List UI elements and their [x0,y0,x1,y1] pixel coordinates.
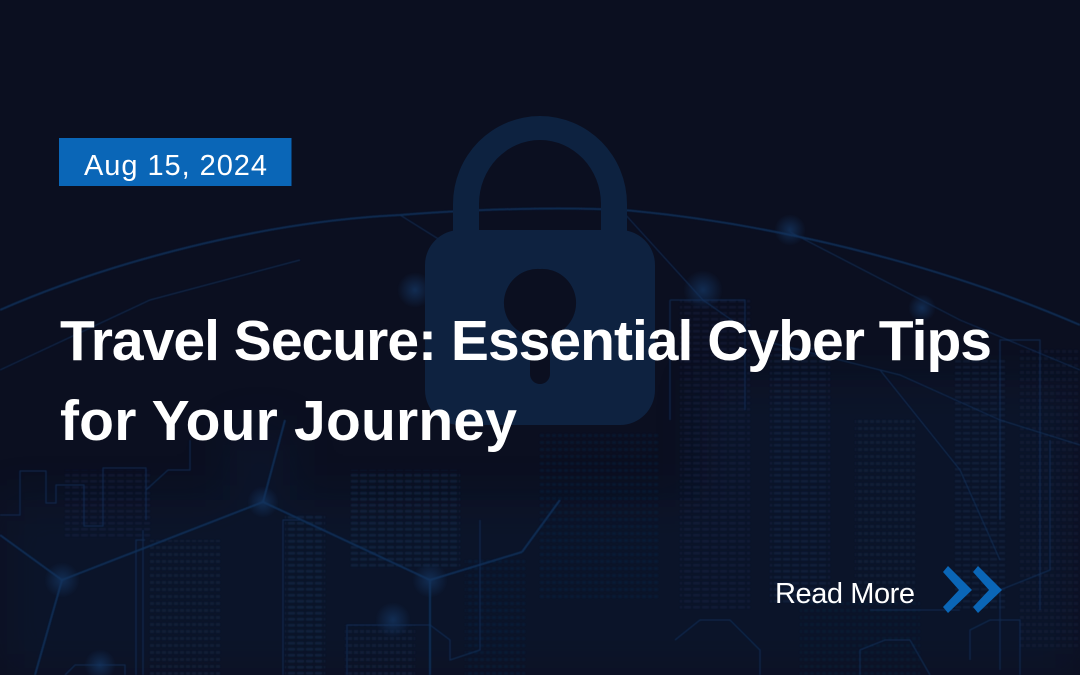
title line 1: Travel Secure: Essential Cyber Tips [60,309,992,373]
lock shackle [453,116,627,232]
background: network lines [0,209,1080,675]
lock body with keyhole [425,230,655,425]
title line 2: for Your Journey [60,389,517,453]
background: city skyline [0,300,1080,675]
date text: Aug 15, 2024 [84,150,267,182]
background: network glow points [44,214,936,675]
title [60,309,992,453]
icon: double chevron arrow [943,566,1002,613]
date badge [59,138,292,186]
icon: padlock [425,116,655,425]
read more text: Read More [775,578,915,610]
read more link [775,566,1002,613]
